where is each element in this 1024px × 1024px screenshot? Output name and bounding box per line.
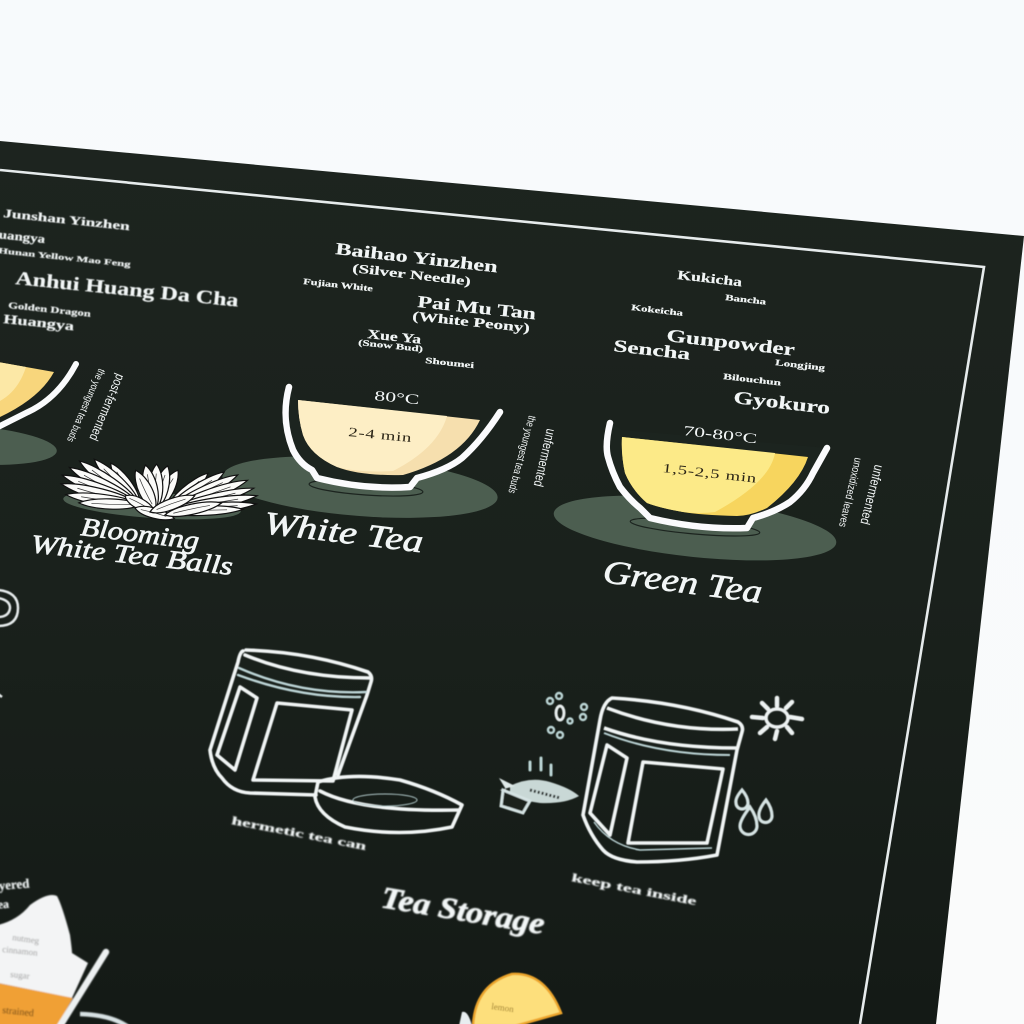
flower plate xyxy=(62,486,242,524)
icon: water drops xyxy=(736,790,772,834)
side note: unfermented, unoxidized leaves: unoxidized leaves xyxy=(836,456,864,529)
caption: keep tea inside: keep tea inside xyxy=(570,870,699,908)
green tea cup xyxy=(607,423,827,540)
icon: swirl (cropped) xyxy=(0,590,18,697)
green tea names xyxy=(613,267,831,418)
caption: hermetic tea can: hermetic tea can xyxy=(230,813,368,853)
yellow tea names xyxy=(0,206,240,333)
yellow tea names: Huangya xyxy=(3,311,76,333)
title: Blooming White Tea Balls xyxy=(29,512,234,581)
white tea names: Xue Ya xyxy=(367,326,423,347)
layered tea cup: strained xyxy=(2,1005,34,1019)
caption: layered (cropped) xyxy=(0,875,31,912)
white tea names: Pai Mu Tan xyxy=(417,292,538,323)
side note: unfermented, unoxidized leaves: unfermented xyxy=(857,463,887,526)
side note: post-fermented: the youngest tea buds xyxy=(64,367,107,444)
icon: sun xyxy=(752,698,802,739)
yellow tea names: Hunan Yellow Mao Feng xyxy=(0,246,131,269)
layered tea cup: nutmeg xyxy=(12,932,40,946)
lemon wedge: lemon xyxy=(491,1001,515,1014)
yellow tea cup (cropped) xyxy=(0,362,76,470)
white tea names: Shoumei xyxy=(425,355,476,370)
side note: unfermented xyxy=(505,414,559,495)
white tea names xyxy=(303,239,538,370)
title: Blooming White Tea Balls: Blooming xyxy=(79,512,201,555)
white tea names: (White Peony) xyxy=(412,308,531,335)
side note: post-fermented: post-fermented xyxy=(86,372,128,443)
green plate under white tea cup xyxy=(220,447,500,527)
green tea names: Bilouchun xyxy=(723,371,782,388)
green plate under green tea cup xyxy=(551,484,839,572)
white tea names: Fujian White xyxy=(303,276,374,293)
icon: hermetic tea can with lid xyxy=(210,650,462,832)
yellow tea names: Junshan Yinzhen xyxy=(3,206,131,233)
side note: unfermented: the youngest tea buds xyxy=(505,414,538,495)
yellow tea names: Anhui Huang Da Cha xyxy=(14,268,240,312)
green tea names: Gyokuro xyxy=(733,387,831,418)
title: Tea Storage: Tea Storage xyxy=(379,879,548,941)
icon: bubbles xyxy=(547,693,587,738)
green tea names: Kukicha xyxy=(677,267,744,289)
side note: post-fermented xyxy=(64,367,128,444)
white tea cup xyxy=(286,387,500,499)
side note: unfermented, unoxidized leaves xyxy=(836,456,887,529)
title: Blooming White Tea Balls: White Tea Balls xyxy=(29,529,234,581)
green tea names: Kokeicha xyxy=(631,302,685,318)
lemon wedge xyxy=(459,974,561,1024)
green tea names: Gunpowder xyxy=(666,325,796,360)
side note: unfermented: unfermented xyxy=(531,427,559,488)
yellow tea names: Golden Dragon xyxy=(8,300,91,319)
green tea names: Longjing xyxy=(775,357,827,373)
white tea names: (Snow Bud) xyxy=(358,337,424,354)
green tea names: Sencha xyxy=(613,336,692,364)
temperature and time: 80°C xyxy=(374,389,420,408)
icon: fish and tea xyxy=(499,758,579,813)
icon: tea can keep inside xyxy=(583,698,742,862)
white tea names: Baihao Yinzhen xyxy=(335,239,499,277)
layered tea cup xyxy=(0,895,132,1024)
white tea cup: 2-4 min xyxy=(348,424,413,445)
icon: blooming tea ball xyxy=(60,455,258,523)
green tea cup: 1,5-2,5 min xyxy=(662,460,758,486)
temperature and time: 70-80°C xyxy=(683,424,758,447)
layered tea cup: cinnamon xyxy=(2,944,39,958)
green tea names: Bancha xyxy=(725,292,768,307)
layered tea cup: sugar xyxy=(10,969,30,981)
title: Green Tea: Green Tea xyxy=(601,554,764,611)
white tea names: (Silver Needle) xyxy=(352,261,471,288)
title: White Tea: White Tea xyxy=(262,504,425,559)
